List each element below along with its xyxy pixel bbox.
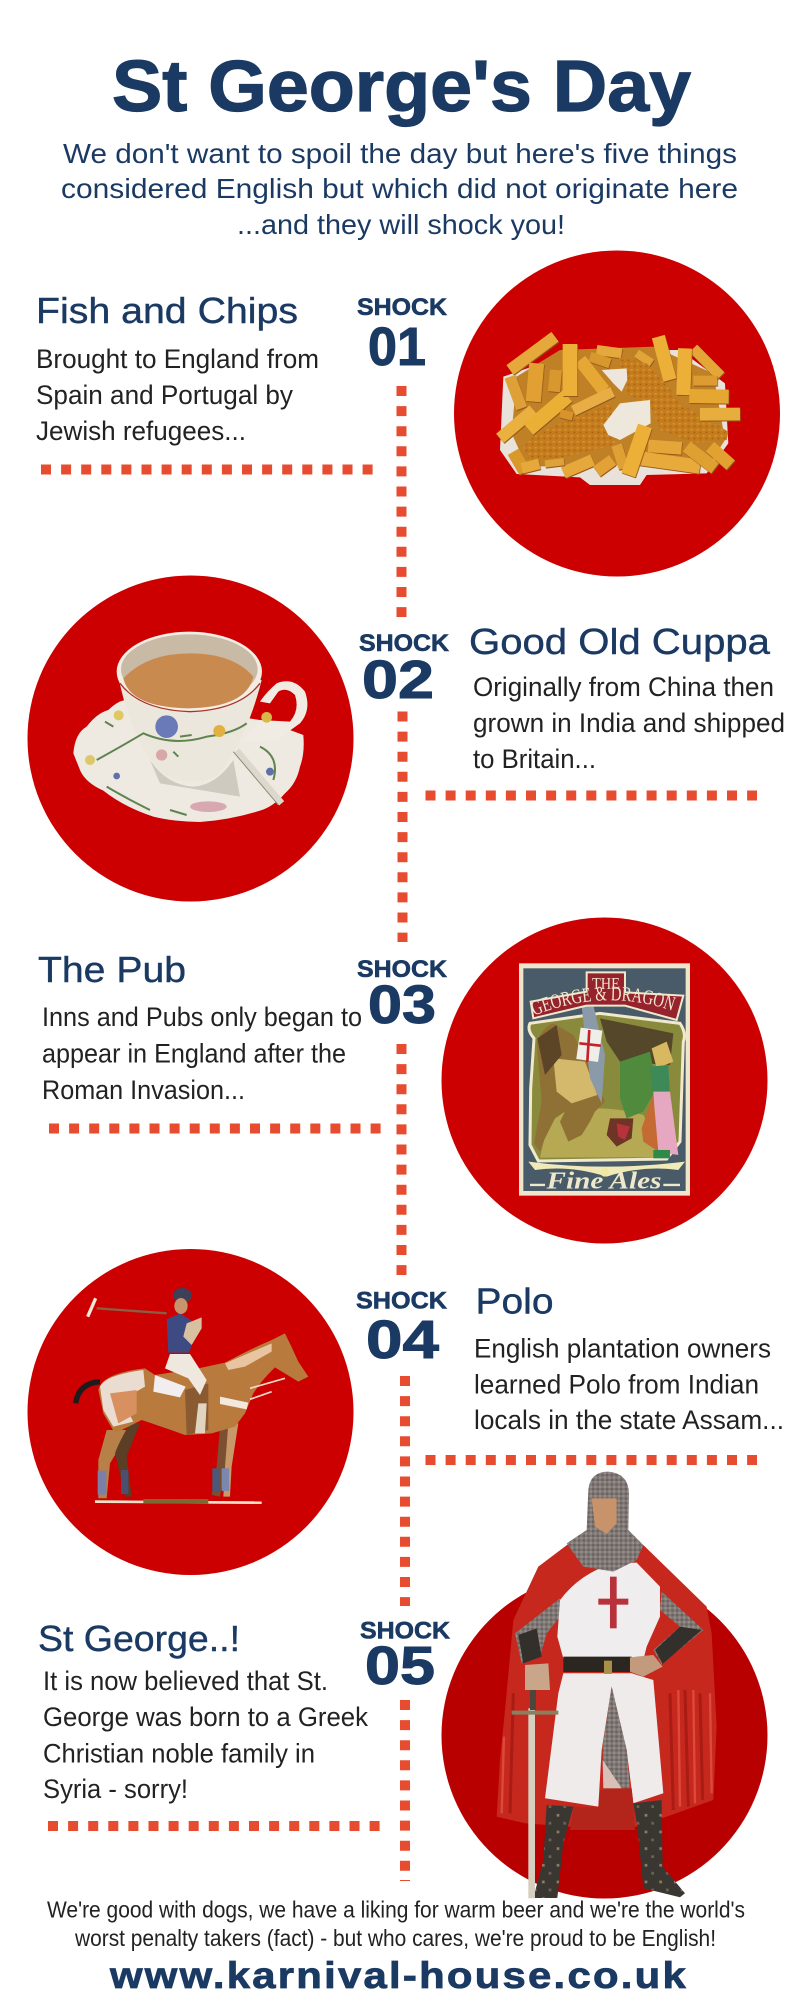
text block: polo: English plantation owners [474,1334,771,1364]
text block: polo: locals in the state Assam... [474,1405,784,1435]
text block: cuppa: grown in India and shipped [473,708,785,738]
shock 04 label [356,1288,448,1370]
shock 04 label: SHOCK [356,1288,448,1314]
icon: george and dragon pub sign: GEORGE & DRAGON [532,986,676,1014]
icon: george and dragon pub sign [519,963,690,1196]
heading: st george: St George..! [38,1618,240,1659]
icon: george and dragon pub sign: THE [592,974,620,993]
footer text: worst penalty takers (fact) - but who cares, we're proud to be English! [74,1925,716,1951]
shock 02 label: SHOCK [359,630,450,657]
subtitle [61,138,738,240]
text block: the pub [42,1002,362,1105]
shock 03 label: 03 [368,975,436,1035]
text block: fish and chips: Brought to England from [36,344,319,374]
icon: george and dragon pub sign: Fine Ales [545,1168,661,1194]
icon: fish and chips [500,337,740,485]
shock 04 label: 04 [366,1310,439,1370]
subtitle: We don't want to spoil the day but here's five things [63,138,737,169]
text block: st george: It is now believed that St. [43,1666,328,1696]
text block: st george: Syria - sorry! [43,1774,188,1804]
icon: polo player on horse [76,1288,308,1503]
red circle: polo [28,1249,354,1575]
divider: st george [48,1821,380,1831]
red circle: st george [442,1572,768,1898]
panel: fish and chips [36,250,780,576]
icon: knight in crusader costume [497,1472,717,1898]
shock 05 label: SHOCK [360,1618,451,1644]
text block: fish and chips: Jewish refugees... [36,416,246,446]
shock 05 label: 05 [365,1636,435,1696]
text block: fish and chips [36,344,319,446]
text block: st george: George was born to a Greek [43,1702,369,1732]
text block: polo [474,1334,784,1435]
shock 03 label: SHOCK [357,956,448,983]
subtitle: ...and they will shock you! [237,209,565,240]
text block: cuppa: to Britain... [473,744,596,774]
panel: the pub [38,918,768,1244]
shock 01 label [357,294,448,377]
icon: cup of tea [73,632,307,822]
text block: cuppa: Originally from China then [473,672,774,702]
timeline connector [400,386,410,1881]
text block: the pub: Roman Invasion... [42,1075,245,1105]
footer text: We're good with dogs, we have a liking for warm beer and we're the world's [47,1896,745,1922]
text block: st george [43,1666,369,1804]
shock 02 label [359,630,450,710]
shock 05 label [360,1618,451,1696]
heading: polo: Polo [476,1280,554,1322]
divider: cuppa [426,790,757,800]
divider: polo [426,1455,757,1465]
text block: polo: learned Polo from Indian [474,1370,759,1400]
red circle: cuppa [28,576,354,902]
panel: good old cuppa [28,576,785,902]
red circle: fish and chips [454,250,780,576]
subtitle: considered English but which did not originate here [61,173,738,204]
heading: the pub: The Pub [38,949,186,990]
text block: the pub: appear in England after the [42,1038,346,1068]
panel: polo [28,1249,784,1575]
panel: st george [38,1472,768,1898]
text block: st george: Christian noble family in [43,1738,315,1768]
shock 01 label: SHOCK [357,294,448,321]
title: St George's Day [112,47,691,127]
shock 03 label [357,956,448,1035]
footer text [47,1896,745,1951]
red circle: the pub [442,918,768,1244]
website url: www.karnival-house.co.uk [109,1955,688,1996]
shock 01 label: 01 [368,317,426,377]
heading: fish and chips: Fish and Chips [36,290,298,331]
divider: the pub [49,1124,381,1134]
text block: the pub: Inns and Pubs only began to [42,1002,362,1032]
text block: cuppa [473,672,785,774]
divider: fish and chips [41,464,373,474]
shock 02 label: 02 [362,650,434,710]
heading: good old cuppa: Good Old Cuppa [469,621,771,662]
text block: fish and chips: Spain and Portugal by [36,380,294,410]
